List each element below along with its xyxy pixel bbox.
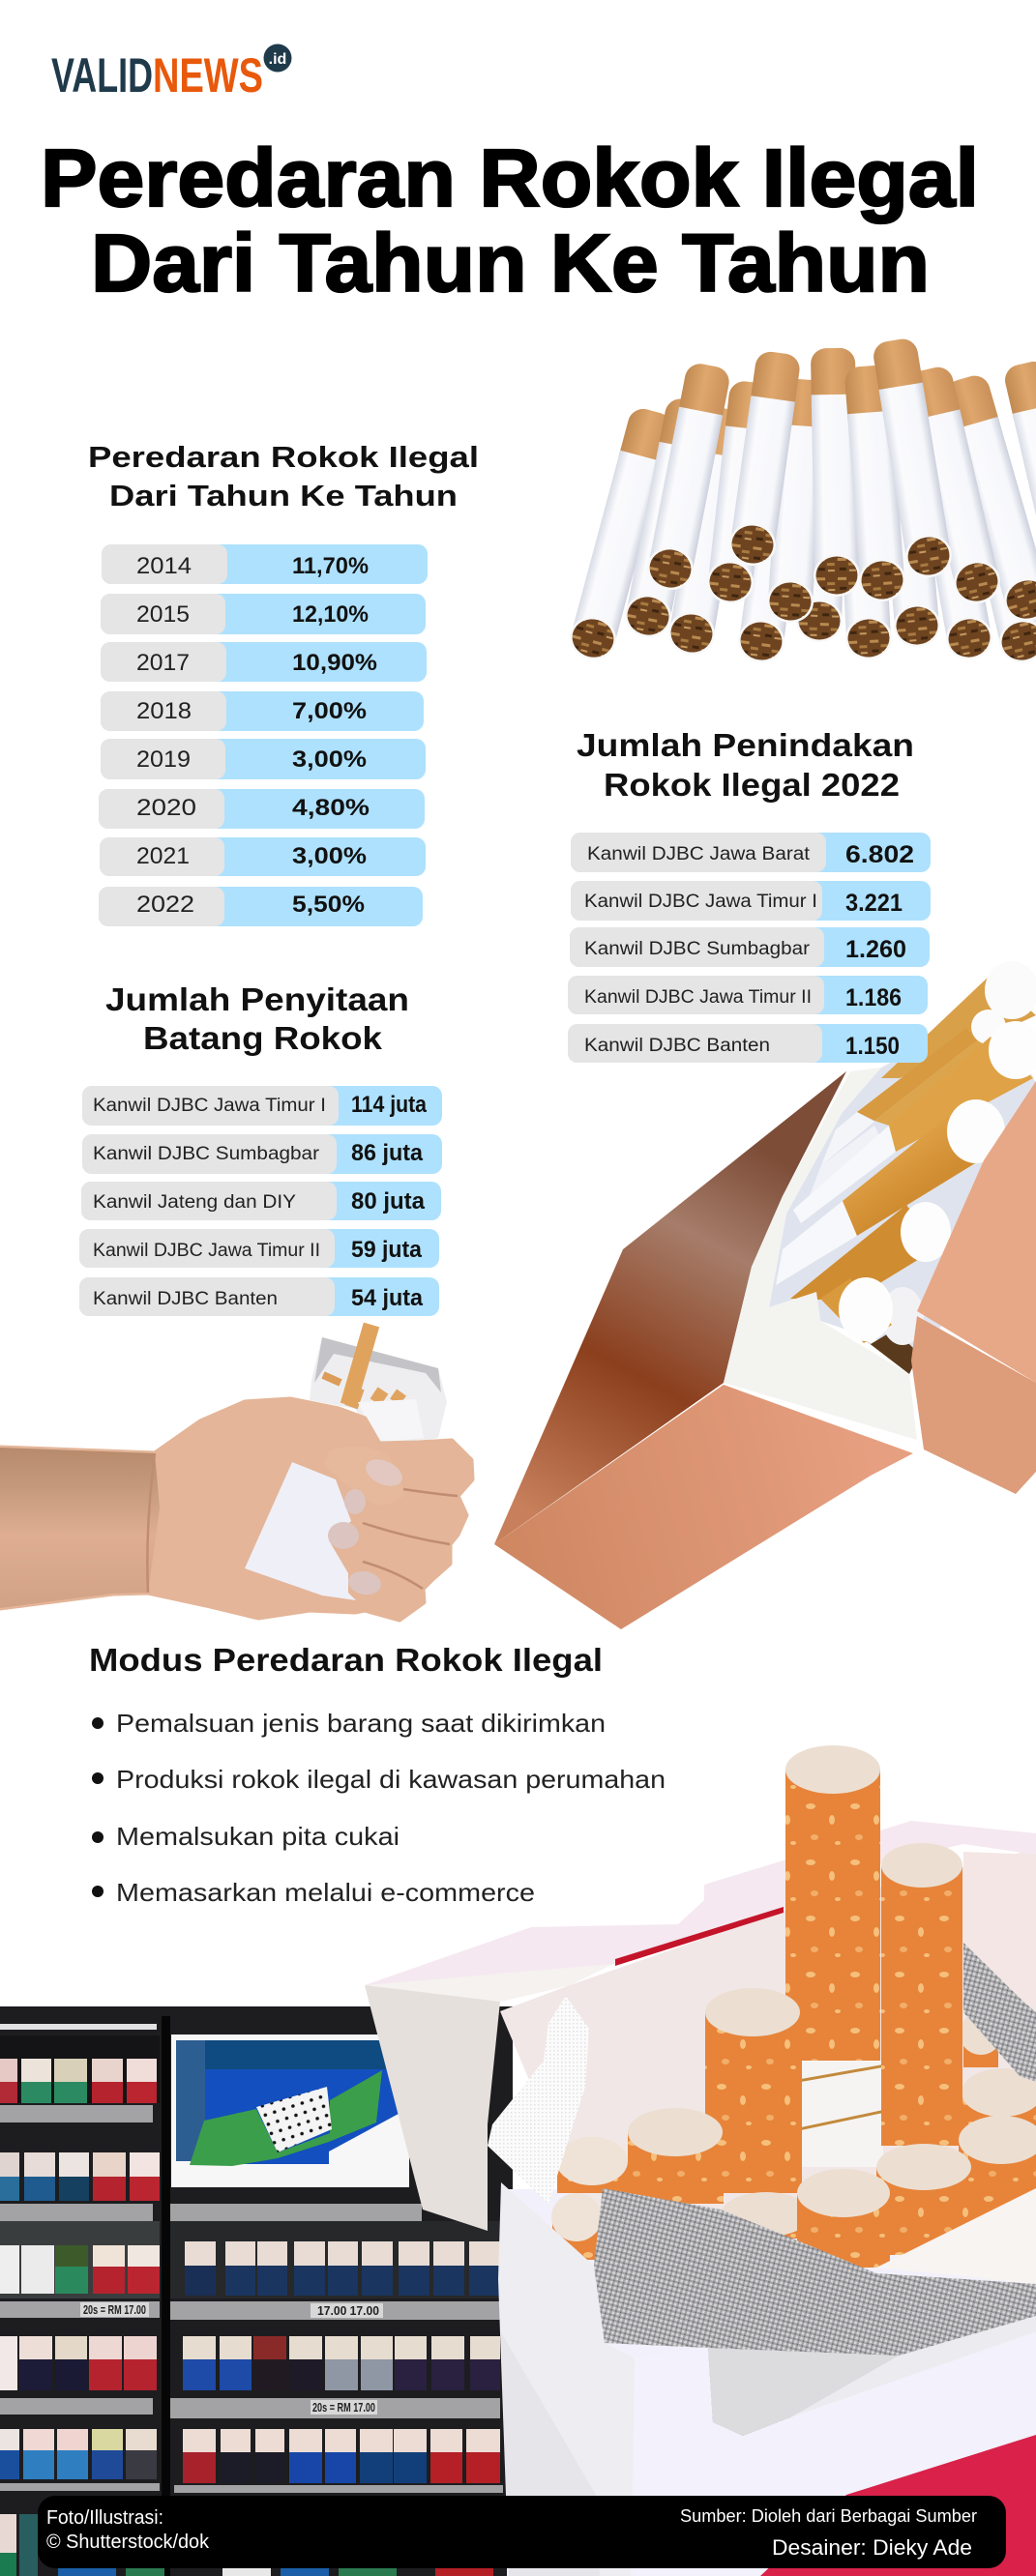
heading: Jumlah Penindakan: Jumlah Penindakan bbox=[577, 727, 914, 763]
foil lower light part bbox=[708, 2348, 899, 2436]
second tall cigarette bbox=[881, 1843, 962, 2146]
row Banten bbox=[79, 1277, 439, 1316]
pack bottom face bbox=[494, 1385, 913, 1629]
row 2019 bbox=[101, 739, 426, 779]
table: jumlah penyitaan bbox=[79, 1086, 442, 1316]
tall cigarette bbox=[785, 1745, 883, 2167]
pack right flap bbox=[911, 1081, 1036, 1494]
red base bbox=[760, 2435, 1036, 2576]
table: jumlah penindakan bbox=[568, 833, 931, 1063]
row 2017: 10,90% bbox=[292, 650, 377, 676]
row 2022: 2022 bbox=[136, 892, 194, 918]
row Sumbagbar: 1.260 bbox=[845, 936, 906, 963]
row Banten: 54 juta bbox=[351, 1285, 424, 1311]
row 2018: 7,00% bbox=[292, 698, 367, 724]
photo: pile of cigarettes bbox=[565, 337, 1036, 667]
row Jawa Timur I: 114 juta bbox=[351, 1092, 428, 1118]
forearm shading bbox=[0, 1448, 160, 1608]
cigarette far back tip bbox=[881, 1287, 924, 1345]
row Jawa Timur II bbox=[79, 1229, 439, 1268]
source credit bbox=[680, 2506, 977, 2560]
front right cigarette bbox=[959, 2116, 1036, 2220]
left column packs bbox=[0, 2059, 160, 2576]
white paper bbox=[876, 2188, 1036, 2284]
photo: opened copper cigarette pack bbox=[494, 961, 1036, 1629]
row 2021: 2021 bbox=[136, 843, 190, 869]
row Jawa Timur II bbox=[568, 976, 928, 1014]
forearm and hand bbox=[0, 1399, 472, 1620]
box base bbox=[507, 2189, 1036, 2576]
price labels bbox=[80, 2302, 383, 2415]
pack opening interior bbox=[769, 1006, 1036, 1354]
finger nails bbox=[328, 1489, 383, 1597]
row Jawa Timur II: Kanwil DJBC Jawa Timur II bbox=[93, 1241, 320, 1261]
row 2015 bbox=[101, 594, 426, 634]
thumb nail bbox=[362, 1454, 406, 1491]
main silver foil bbox=[594, 2188, 1036, 2436]
centre cigarette bbox=[797, 2169, 890, 2268]
short cigarette left bbox=[628, 2108, 724, 2204]
row 2020: 2020 bbox=[136, 795, 196, 821]
row 2022: 5,50% bbox=[292, 892, 365, 918]
logo: Validnews.id: NEWS bbox=[153, 48, 263, 102]
source credit: Sumber: Dioleh dari Berbagai Sumber bbox=[680, 2506, 977, 2526]
cigarette back top bbox=[881, 961, 1036, 1078]
list: modus bbox=[92, 1709, 666, 1907]
logo: Validnews.id: .id bbox=[269, 51, 286, 68]
row 2018: 2018 bbox=[136, 698, 192, 724]
heading: Jumlah Penyitaan bbox=[105, 981, 409, 1056]
left white foil flap bbox=[488, 1996, 589, 2204]
bullet 1: Pemalsuan jenis barang saat dikirimkan bbox=[116, 1709, 606, 1738]
row Jawa Barat bbox=[571, 833, 931, 872]
bullet 2: Produksi rokok ilegal di kawasan perumahan bbox=[116, 1765, 666, 1794]
front stub bbox=[721, 2192, 812, 2239]
row Jawa Timur II: 1.186 bbox=[845, 984, 902, 1011]
pack white front bbox=[358, 1399, 424, 1443]
table: yearly percentages bbox=[99, 544, 428, 926]
heading: Jumlah Penyitaan: Batang Rokok bbox=[143, 1020, 383, 1056]
photo: red and white cigarette box bbox=[365, 1745, 1036, 2576]
foil top right bbox=[963, 1943, 1036, 2082]
lower left stub bbox=[551, 2193, 602, 2260]
lid side panel bbox=[365, 1964, 613, 2231]
footer bar bbox=[38, 2496, 1006, 2568]
pack white rim bbox=[724, 1068, 917, 1440]
row 2020 bbox=[99, 789, 425, 829]
row 2018 bbox=[101, 691, 424, 731]
price labels: 17.00 17.00 bbox=[317, 2303, 379, 2318]
box left side bbox=[498, 2182, 635, 2576]
photo: hand crushing cigarette pack bbox=[0, 1325, 472, 1620]
row 2021 bbox=[100, 837, 426, 876]
row Jawa Timur I: Kanwil DJBC Jawa Timur I bbox=[93, 1096, 326, 1116]
lower row peeking below footer bbox=[58, 2568, 493, 2576]
front cigarette bbox=[876, 2144, 971, 2255]
back left stubs bbox=[556, 2137, 628, 2193]
price labels: 20s = RM 17.00 bbox=[312, 2400, 375, 2415]
cigarette long front bbox=[793, 1021, 1036, 1223]
cigarettes in pack bbox=[323, 1325, 401, 1407]
row Sumbagbar: Kanwil DJBC Sumbagbar bbox=[93, 1144, 320, 1164]
upper light strip bbox=[0, 2024, 157, 2030]
price labels: 20s = RM 17.00 bbox=[83, 2302, 146, 2317]
lid top surface bbox=[365, 1821, 1036, 1985]
right column packs bbox=[183, 2241, 500, 2483]
source credit: Desainer: Dieky Ade bbox=[772, 2535, 972, 2560]
row Sumbagbar: Kanwil DJBC Sumbagbar bbox=[584, 939, 811, 959]
photo credit: © Shutterstock/dok bbox=[46, 2532, 210, 2553]
row Jawa Timur I bbox=[571, 881, 931, 921]
bullet 3: Memalsukan pita cukai bbox=[116, 1822, 400, 1851]
finger creases bbox=[147, 1453, 458, 1593]
white pack body bbox=[245, 1462, 356, 1600]
row Jawa Barat: Kanwil DJBC Jawa Barat bbox=[587, 844, 811, 864]
heading: Peredaran Rokok Ilegal bbox=[88, 440, 479, 512]
row 2019: 2019 bbox=[136, 746, 191, 773]
cigarette back right bbox=[962, 2068, 1036, 2160]
row 2017 bbox=[101, 642, 427, 682]
row 2017: 2017 bbox=[136, 650, 190, 676]
row 2015: 12,10% bbox=[292, 601, 369, 628]
row Jawa Timur I bbox=[82, 1086, 442, 1126]
cigarettes back middle bbox=[803, 1010, 1006, 1214]
row 2014 bbox=[102, 544, 428, 584]
heading: Jumlah Penindakan bbox=[577, 727, 914, 803]
row Sumbagbar bbox=[82, 1134, 442, 1174]
right wall bbox=[963, 1852, 1036, 2007]
logo: Validnews.id: VALID bbox=[51, 48, 153, 102]
row Sumbagbar bbox=[570, 927, 930, 967]
row Jateng dan DIY: 80 juta bbox=[351, 1188, 426, 1215]
row 2015: 2015 bbox=[136, 601, 190, 628]
pack wrapper bbox=[310, 1337, 447, 1443]
medium cigarette bbox=[705, 1988, 802, 2193]
row 2020: 4,80% bbox=[292, 795, 370, 821]
photo credit bbox=[46, 2507, 210, 2553]
inner back wall bbox=[500, 1849, 1036, 2224]
row 2022 bbox=[99, 887, 423, 926]
row Jawa Timur I: Kanwil DJBC Jawa Timur I bbox=[584, 892, 817, 912]
title bbox=[41, 132, 979, 308]
cigarette back far bbox=[960, 2012, 1002, 2067]
row Jateng dan DIY bbox=[81, 1182, 441, 1220]
title: Peredaran Rokok Ilegal bbox=[41, 132, 979, 223]
title: Dari Tahun Ke Tahun bbox=[91, 218, 930, 308]
row 2019: 3,00% bbox=[292, 746, 367, 773]
cigarette centre bbox=[776, 1099, 1005, 1285]
photo: cigarette store shelves bbox=[0, 2006, 513, 2576]
heading: Peredaran Rokok Ilegal: Dari Tahun Ke Tahun bbox=[109, 479, 458, 512]
logo: Validnews.id bbox=[51, 44, 292, 102]
row Jateng dan DIY: Kanwil Jateng dan DIY bbox=[93, 1192, 296, 1213]
row Jawa Timur I: 3.221 bbox=[845, 890, 903, 917]
shelves bbox=[0, 2105, 503, 2493]
thumb bbox=[324, 1447, 403, 1505]
cigarette lower bbox=[790, 1202, 951, 1301]
row Jawa Timur II: 59 juta bbox=[351, 1237, 423, 1263]
row Banten: Kanwil DJBC Banten bbox=[584, 1036, 770, 1056]
heading: Modus Peredaran: Modus Peredaran Rokok Ilegal bbox=[89, 1642, 603, 1678]
cigarette short front bbox=[820, 1277, 893, 1343]
heading: Jumlah Penindakan: Rokok Ilegal 2022 bbox=[604, 767, 900, 803]
row Banten bbox=[568, 1024, 928, 1063]
heading: Jumlah Penyitaan: Jumlah Penyitaan bbox=[105, 981, 409, 1017]
row 2021: 3,00% bbox=[292, 843, 367, 869]
bullet 4: Memasarkan melalui e-commerce bbox=[116, 1878, 535, 1907]
row Jawa Timur II: Kanwil DJBC Jawa Timur II bbox=[584, 987, 812, 1008]
pack left face bbox=[494, 1071, 846, 1544]
row Banten: 1.150 bbox=[845, 1033, 900, 1060]
heading: Peredaran Rokok Ilegal: Peredaran Rokok Ilegal bbox=[88, 440, 479, 474]
row Sumbagbar: 86 juta bbox=[351, 1140, 424, 1166]
row Jawa Barat: 6.802 bbox=[845, 841, 914, 868]
row 2014: 2014 bbox=[136, 553, 192, 579]
box front bbox=[635, 2334, 1036, 2576]
photo credit: Foto/Illustrasi: bbox=[46, 2507, 163, 2529]
row 2014: 11,70% bbox=[292, 553, 369, 579]
row Banten: Kanwil DJBC Banten bbox=[93, 1289, 278, 1309]
lid red strip bbox=[615, 1907, 784, 1966]
display screen bbox=[171, 2034, 409, 2187]
